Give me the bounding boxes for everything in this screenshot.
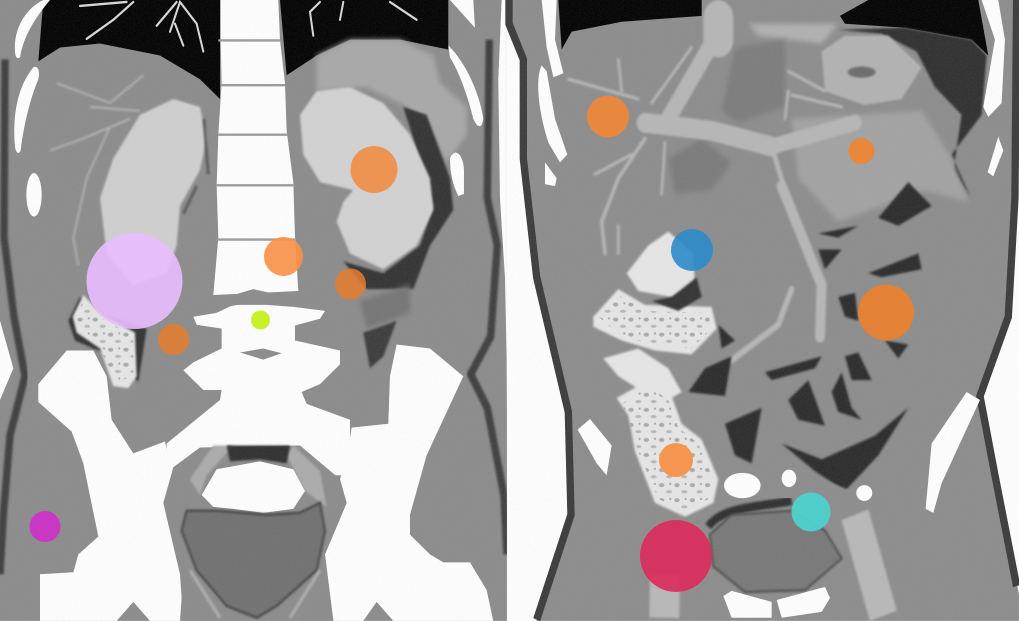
- marker: orange kidney circle: [350, 146, 398, 193]
- stomach: [822, 36, 922, 105]
- markers on left scan: [30, 146, 398, 542]
- bowel speckles: [598, 295, 713, 511]
- marker: magenta circle: [30, 511, 60, 542]
- speckle texture: [0, 0, 507, 621]
- right kidney image: [300, 87, 433, 269]
- marker: blue circle: [671, 229, 713, 271]
- spine: [213, 0, 298, 295]
- panel: right CT scan: [505, 0, 1019, 621]
- pelvis soft tissue: [163, 446, 347, 621]
- marker: yellow-green circle: [251, 310, 270, 330]
- rectum with contrast: [202, 461, 305, 513]
- left kidney image: [99, 98, 208, 254]
- markers on right scan: [587, 96, 914, 592]
- bright contrast loops and bones: [538, 0, 1005, 618]
- mid-abdomen bowel tone: [668, 139, 732, 194]
- dark fat beside stomach: [838, 28, 987, 196]
- marker: orange small circle: [848, 138, 874, 164]
- bowel with contrast: [68, 297, 147, 382]
- dark fat near caecum: [652, 277, 702, 311]
- speckle texture: [505, 0, 1019, 621]
- marker: orange liver circle: [587, 96, 629, 138]
- vertebrae, sacrum and iliac bones: [38, 305, 493, 621]
- marker: lilac circle: [86, 233, 182, 329]
- liver vessels: [50, 75, 143, 265]
- left lungs: [38, 0, 448, 99]
- right body tissue: [509, 0, 1019, 621]
- lung vessels: [80, 2, 417, 51]
- marker: orange lower circle: [158, 324, 189, 355]
- right lungs: [558, 0, 988, 55]
- panel: left CT scan: [0, 0, 507, 621]
- bladder: [708, 501, 792, 527]
- marker: teal circle: [792, 492, 830, 532]
- left ribs: [14, 0, 483, 217]
- marker: crimson circle: [640, 520, 712, 592]
- portal and mesenteric vessels: [568, 18, 855, 360]
- dark mesentery: [688, 182, 932, 491]
- marker: orange large circle: [858, 284, 914, 340]
- spleen: [317, 40, 467, 162]
- marker: orange psoas circle: [335, 268, 366, 300]
- perirenal fat: [343, 107, 453, 289]
- tissue above bladder: [830, 482, 848, 492]
- marker: orange spine circle: [264, 237, 303, 276]
- bladder: [182, 503, 325, 618]
- bowel with contrast: [593, 232, 718, 517]
- femoral vessels: [664, 515, 883, 618]
- left body tissue: [0, 0, 507, 621]
- marker: orange caecum circle: [659, 443, 693, 477]
